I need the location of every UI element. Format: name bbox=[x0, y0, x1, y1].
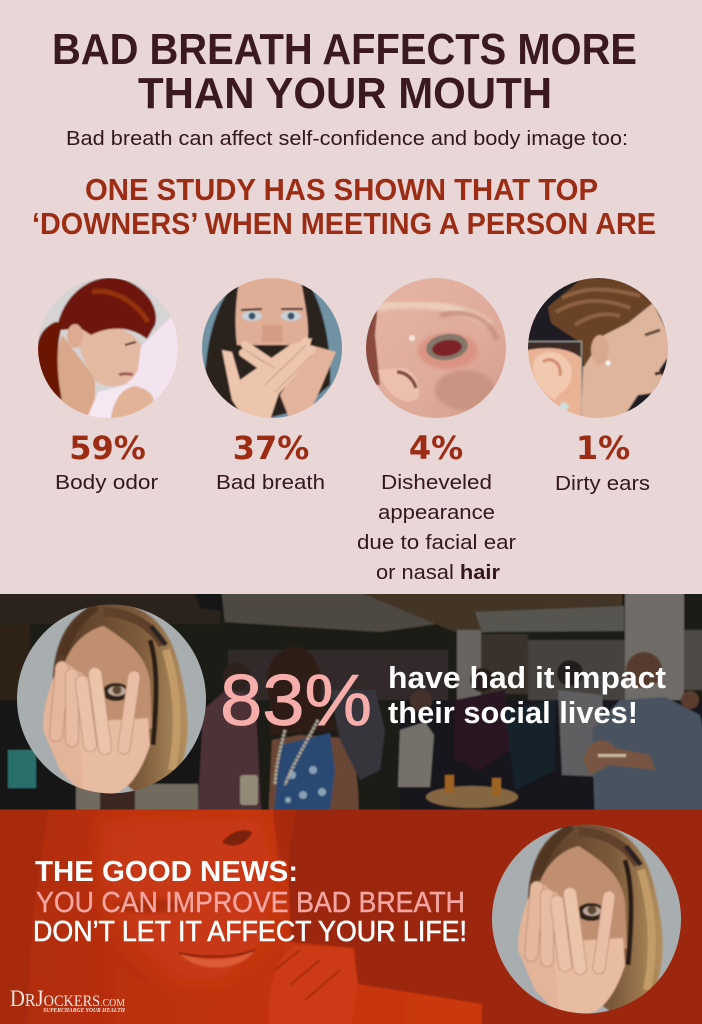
stat: dirty ears: Dirty ears bbox=[555, 473, 650, 495]
good news text: YOU CAN IMPROVE BAD BREATH bbox=[36, 887, 465, 919]
stat: disheveled appearance: 4% bbox=[409, 429, 463, 467]
stat: disheveled appearance: Disheveled bbox=[381, 472, 492, 494]
stat: 83%: 83% bbox=[220, 661, 372, 741]
stat: disheveled appearance: or nasal hair bbox=[376, 562, 500, 584]
stat caption: social lives: have had it impact bbox=[388, 660, 666, 695]
stat caption: social lives: their social lives! bbox=[388, 695, 638, 730]
stat: body odor: 59% bbox=[69, 429, 146, 467]
stat: bad breath bbox=[216, 429, 325, 494]
stat: dirty ears: 1% bbox=[576, 429, 630, 467]
icon: woman peeking through fingers, oval repeat bbox=[492, 824, 681, 1014]
stat: body odor: Body odor bbox=[55, 472, 158, 494]
icon: woman peeking through fingers, oval bbox=[17, 604, 206, 794]
title bbox=[52, 25, 637, 118]
stat: dirty ears bbox=[555, 429, 650, 495]
stat: bad breath: Bad breath bbox=[216, 472, 325, 494]
icon: nose skin close-up photo bbox=[366, 278, 506, 418]
panel: red good news bbox=[0, 800, 702, 1024]
logo: DrJockers.com: SUPERCHARGE YOUR HEALTH bbox=[43, 1007, 126, 1014]
stat: disheveled appearance bbox=[357, 429, 516, 584]
panel: dark bar scene bbox=[0, 594, 702, 810]
title: THAN YOUR MOUTH bbox=[138, 69, 552, 118]
stat: body odor bbox=[55, 429, 158, 494]
stat: disheveled appearance: appearance bbox=[378, 502, 495, 524]
study heading: ONE STUDY HAS SHOWN THAT TOP bbox=[85, 172, 598, 207]
title: BAD BREATH AFFECTS MORE bbox=[52, 25, 637, 74]
logo: DrJockers.com: DRJOCKERS.COM bbox=[10, 986, 125, 1011]
subtitle: Bad breath can affect self-confidence and body image too: bbox=[66, 128, 628, 150]
stat: disheveled appearance: due to facial ear bbox=[357, 532, 516, 554]
study heading bbox=[32, 172, 656, 241]
good news text: DON’T LET IT AFFECT YOUR LIFE! bbox=[33, 916, 467, 948]
study heading: ‘DOWNERS’ WHEN MEETING A PERSON ARE bbox=[32, 206, 656, 241]
icon: woman covering mouth photo bbox=[202, 278, 342, 418]
good news text bbox=[33, 856, 467, 948]
background panel: pink bbox=[0, 0, 702, 594]
icon: woman smelling armpit photo bbox=[38, 278, 178, 418]
stat caption: social lives bbox=[388, 660, 666, 730]
stat: bad breath: 37% bbox=[233, 429, 309, 467]
icon: woman profile with ear inset photo bbox=[528, 278, 668, 418]
good news text: THE GOOD NEWS: bbox=[35, 856, 298, 888]
